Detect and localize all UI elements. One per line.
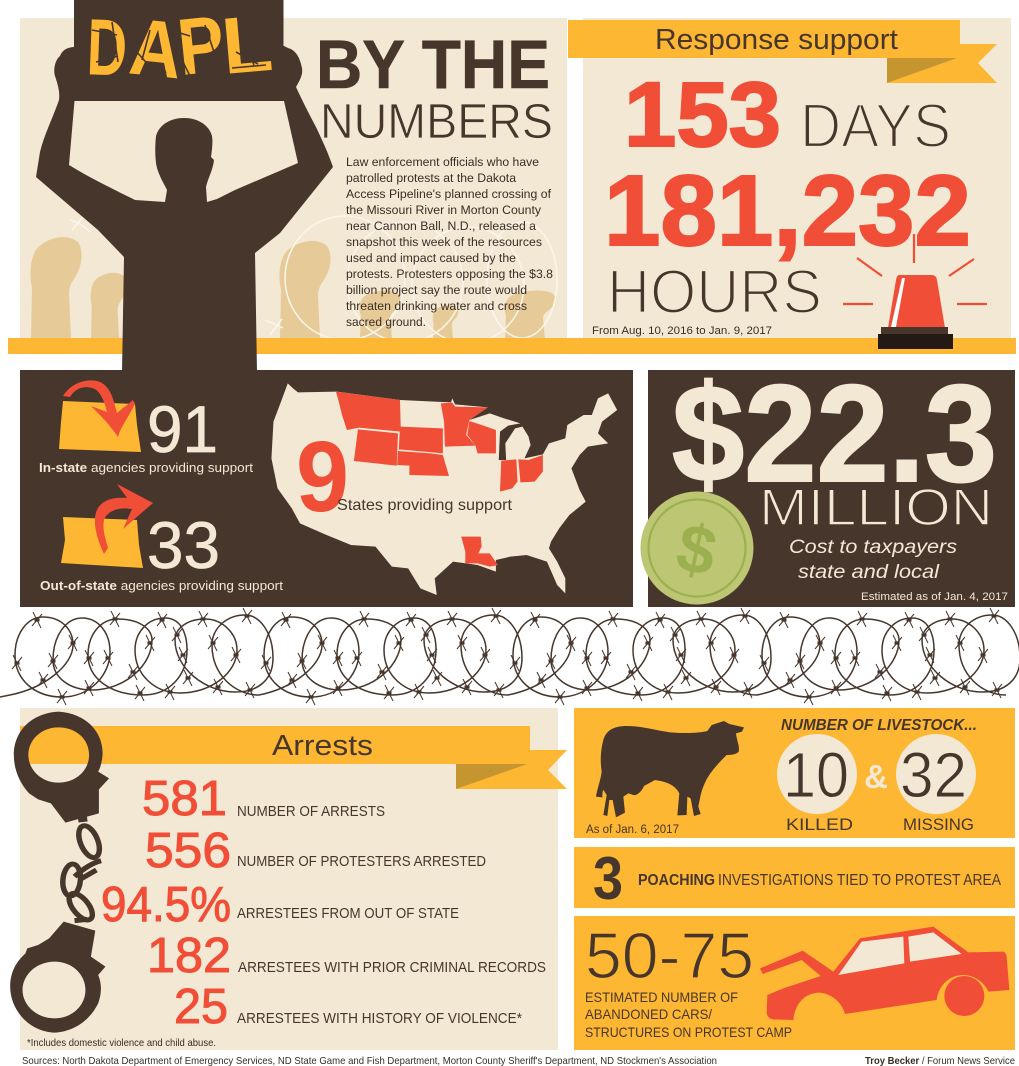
dark panel: agencies and states map bbox=[20, 370, 633, 607]
panel: poaching: POACHING bbox=[638, 872, 715, 889]
map: United States with supporting states bbox=[271, 383, 617, 595]
orange band across the top section bbox=[8, 338, 1016, 354]
protest sign bbox=[74, 0, 284, 101]
cost block: Cost to taxpayers bbox=[789, 537, 958, 558]
sign text: DAPL: A bbox=[126, 2, 187, 95]
upper cuff bbox=[14, 712, 109, 823]
banner: Arrests bbox=[20, 726, 567, 789]
arrests stat labels: NUMBER OF ARRESTS bbox=[237, 803, 385, 820]
panel: abandoned cars: ABANDONED CARS/ bbox=[585, 1006, 712, 1022]
panel: livestock: NUMBER OF LIVESTOCK... bbox=[781, 717, 977, 734]
panel: abandoned cars: ESTIMATED NUMBER OF bbox=[585, 989, 738, 1005]
intro text block: billion project say the route would bbox=[346, 283, 527, 297]
intro text block: threaten drinking water and cross bbox=[346, 299, 527, 313]
banner: Arrests: Arrests bbox=[272, 730, 373, 762]
icon: North Dakota with inward arrow bbox=[59, 380, 141, 452]
lower cuff bbox=[10, 922, 105, 1033]
out-of-state agencies block bbox=[40, 484, 283, 593]
in-state agencies block bbox=[39, 380, 253, 475]
map caption: States providing support bbox=[337, 497, 513, 514]
panel: abandoned cars: 50-75 bbox=[585, 919, 754, 992]
stat: 153 days: 153 bbox=[624, 64, 781, 166]
missing count bbox=[896, 734, 976, 834]
map outline bbox=[271, 383, 617, 595]
intro text block: protests. Protesters opposing the $3.8 bbox=[346, 267, 553, 281]
arrests stat labels: NUMBER OF PROTESTERS ARRESTED bbox=[237, 853, 486, 870]
stat: 181,232 hours: HOURS bbox=[607, 258, 822, 327]
intro text block: sacred ground. bbox=[346, 315, 426, 329]
in-state agencies block: 91 bbox=[147, 392, 218, 466]
intro text block bbox=[346, 155, 553, 329]
intro text block: patrolled protests at the Dakota bbox=[346, 171, 516, 185]
intro text block: Access Pipeline's planned crossing of bbox=[346, 187, 552, 201]
raised fists in the background bbox=[30, 237, 556, 340]
arrests stat rows bbox=[101, 772, 231, 1034]
intro text block: near Cannon Ball, N.D., released a bbox=[346, 219, 536, 233]
out-of-state agencies block: 33 bbox=[147, 508, 220, 582]
banner: Response support: Response support bbox=[655, 24, 898, 56]
stat: 181,232 hours bbox=[604, 155, 971, 327]
icon: North Dakota with outward arrow bbox=[61, 484, 153, 568]
arrests stat labels: ARRESTEES WITH HISTORY OF VIOLENCE* bbox=[237, 1010, 522, 1027]
intro text block: Law enforcement officials who have bbox=[346, 155, 539, 169]
cost block bbox=[640, 357, 1008, 604]
cost block: state and local bbox=[798, 562, 940, 583]
icon: car bbox=[760, 927, 1009, 1020]
stat: 153 days bbox=[624, 64, 951, 166]
banner: Response support bbox=[568, 20, 997, 83]
killed count bbox=[777, 734, 857, 834]
title: By the numbers bbox=[316, 26, 553, 149]
big 9: 9 bbox=[296, 421, 349, 533]
cost block: Estimated as of Jan. 4, 2017 bbox=[861, 591, 1008, 603]
title: By the numbers: NUMBERS bbox=[320, 95, 553, 149]
arrests stat rows: 581 bbox=[142, 772, 227, 826]
arrests stat labels: ARRESTEES WITH PRIOR CRIMINAL RECORDS bbox=[238, 959, 546, 976]
sign text: DAPL: D bbox=[86, 2, 129, 93]
supporting states in red bbox=[336, 392, 543, 567]
missing count: MISSING bbox=[903, 815, 974, 834]
icon: cow bbox=[596, 721, 744, 817]
arrests stat rows: 556 bbox=[145, 824, 231, 878]
footnote: *Includes domestic violence and child abuse. bbox=[27, 1038, 216, 1049]
arrests stat rows: 182 bbox=[147, 929, 231, 983]
panel: abandoned cars bbox=[574, 916, 1015, 1050]
background barbed wire in white bbox=[70, 216, 557, 343]
panel: response support background bbox=[583, 18, 1011, 340]
sign text: DAPL: P bbox=[174, 0, 229, 92]
barbed wire divider bbox=[0, 608, 1019, 705]
cost block: MILLION bbox=[759, 479, 993, 537]
icon: coin bbox=[640, 492, 754, 604]
panel: poaching: 3 bbox=[593, 845, 623, 912]
chain bbox=[61, 819, 104, 923]
panel: top left cream background bbox=[20, 18, 567, 340]
killed count: 10 bbox=[783, 739, 849, 811]
intro text block: the Missouri River in Morton County bbox=[346, 203, 542, 217]
sign text: DAPL: L bbox=[218, 0, 276, 91]
stat: 181,232 hours: 181,232 bbox=[604, 155, 971, 267]
stat: 153 days: DAYS bbox=[800, 92, 951, 161]
intro text block: snapshot this week of the resources bbox=[346, 235, 542, 249]
dark panel: cost bbox=[648, 370, 1015, 607]
arrests stat rows: 25 bbox=[174, 980, 228, 1034]
panel: arrests background bbox=[20, 708, 558, 1050]
out-of-state agencies block: Out-of-state agencies providing support bbox=[40, 578, 283, 593]
silhouette of protester bbox=[36, 46, 333, 372]
panel: livestock: As of Jan. 6, 2017 bbox=[586, 824, 679, 836]
intro text block: used and impact caused by the bbox=[346, 251, 516, 265]
killed count: KILLED bbox=[786, 815, 853, 834]
panel: livestock bbox=[574, 708, 1015, 838]
icon: handcuffs bbox=[10, 712, 109, 1033]
title: By the numbers: BY THE bbox=[316, 26, 550, 103]
date range note: From Aug. 10, 2016 to Jan. 9, 2017 bbox=[592, 325, 772, 337]
panel: poaching bbox=[574, 845, 1015, 912]
icon: coin: $ bbox=[670, 509, 723, 591]
in-state agencies block: In-state agencies providing support bbox=[39, 460, 253, 475]
arrests stat labels: ARRESTEES FROM OUT OF STATE bbox=[237, 905, 459, 922]
ampersand: & bbox=[864, 758, 888, 795]
panel: abandoned cars: STRUCTURES ON PROTEST CAMP bbox=[585, 1024, 792, 1040]
arrests stat labels bbox=[237, 803, 546, 1027]
sign text: DAPL bbox=[86, 0, 276, 95]
arrests stat rows: 94.5% bbox=[101, 878, 231, 932]
missing count: 32 bbox=[900, 739, 967, 811]
cost block: $22.3 bbox=[672, 357, 997, 511]
icon: police siren bbox=[843, 234, 987, 349]
